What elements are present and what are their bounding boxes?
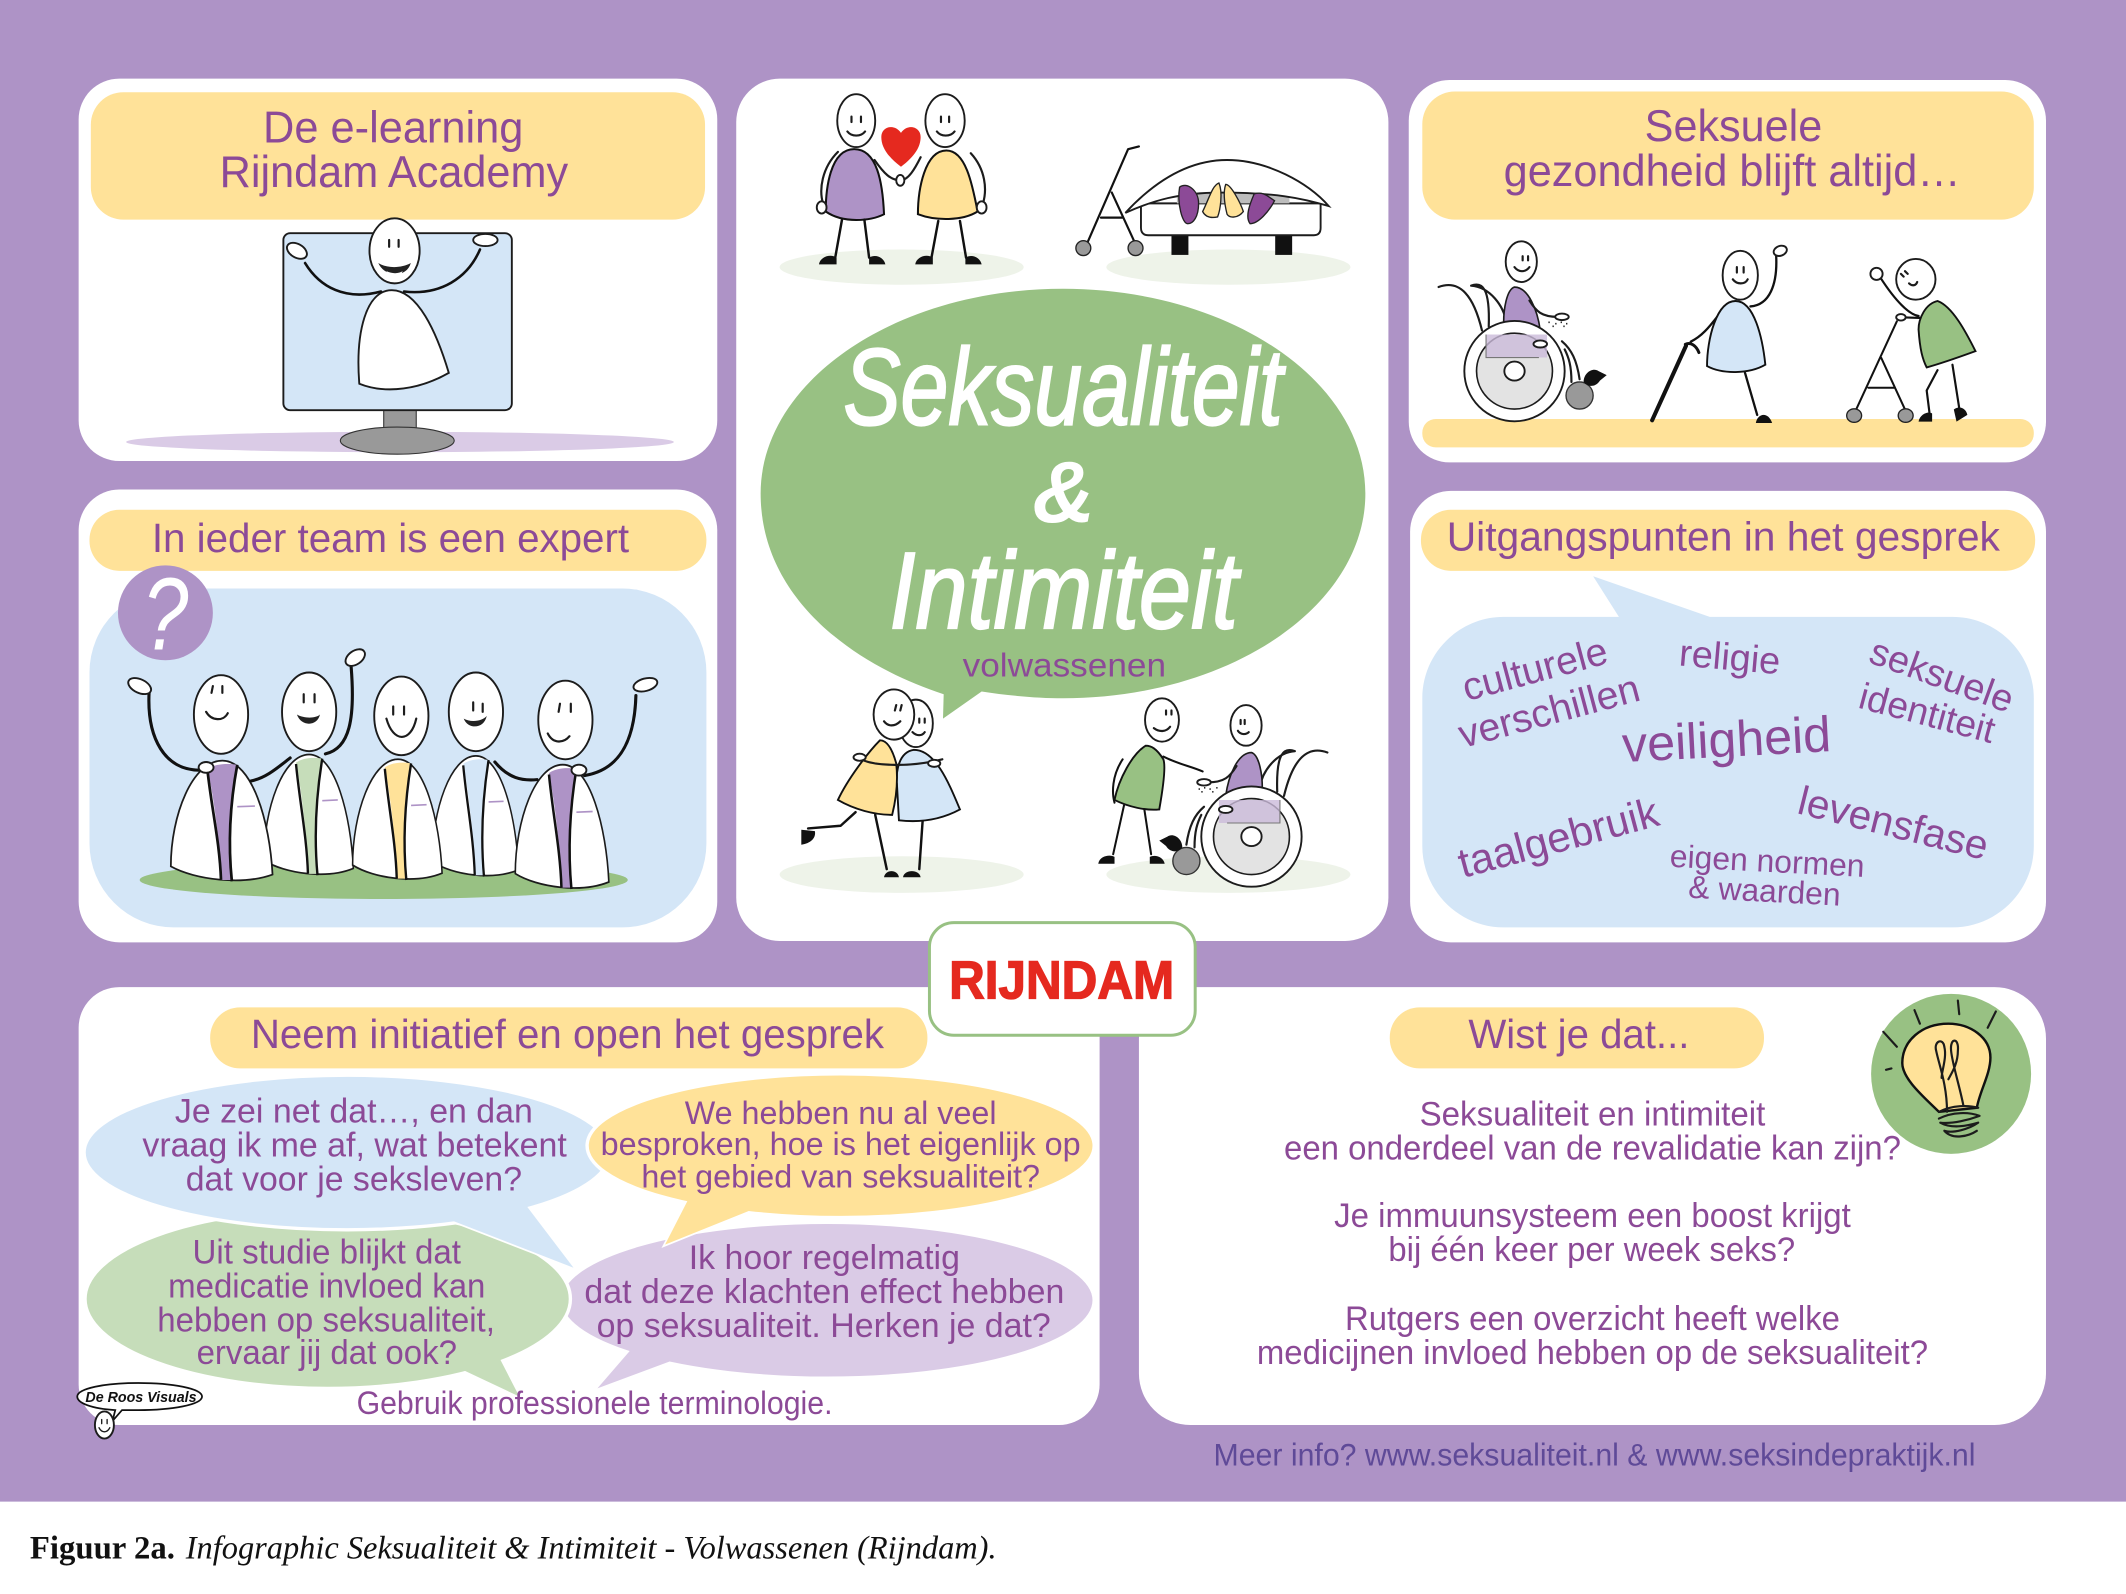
heading: De e-learning Rijndam Academy: De e-learning [263,103,523,152]
heading: De e-learning Rijndam Academy: Rijndam Academy [220,148,568,197]
logo: Rijndam [929,923,1195,1035]
heading: In ieder team is een expert [89,510,706,571]
speech bubble: yellow: We hebben nu al veel [685,1095,997,1131]
heading: Seksuele gezondheid blijft altijd: Seksuele [1645,102,1822,151]
speech bubble: title: Intimiteit [889,530,1241,651]
text: did you know facts: een onderdeel van de revalidatie kan zijn? [1284,1129,1901,1167]
speech bubble with keywords: culturele [1457,629,1612,710]
speech bubble with keywords: verschillen [1454,666,1644,757]
speech bubble with keywords: seksuele [1864,631,2019,721]
illustration: five team members [126,646,659,899]
speech bubble: purple [560,1222,1094,1388]
speech bubble with keywords [1422,576,2034,927]
heading: Uitgangspunten in het gesprek [1421,510,2035,571]
speech bubble with keywords: & waarden [1688,869,1842,913]
text: green bubble question [157,1234,495,1372]
text: green bubble question: medicatie invloed kan [168,1268,485,1306]
panel: starting points in conversation [1410,491,2046,942]
heading: Neem initiatief en open het gesprek: Neem initiatief en open het gesprek [251,1011,885,1057]
icon: heart [881,127,921,167]
panel: did you know [1139,987,2046,1425]
illustration: hugging couple [780,689,1024,893]
text: did you know facts: Seksualiteit en intimiteit [1420,1095,1766,1133]
speech bubble with keywords: eigen normen [1669,838,1865,884]
illustration: person with walker [1847,259,1975,422]
heading: In ieder team is een expert: In ieder team is een expert [152,515,629,561]
illustration: couple with heart [780,94,1024,285]
heading: De e-learning Rijndam Academy [91,92,705,220]
speech bubble: blue: Je zei net dat…, en dan [175,1093,533,1131]
speech bubble: green [85,1209,570,1397]
text: did you know facts: medicijnen invloed hebben op de seksualiteit? [1257,1334,1928,1372]
ground bar [1422,419,2034,447]
heading: Wist je dat: Wist je dat... [1468,1011,1689,1057]
speech bubble: blue: vraag ik me af, wat betekent [142,1127,567,1165]
text: did you know facts: Je immuunsysteem een boost krijgt [1334,1197,1851,1235]
speech bubble with keywords: levensfase [1794,777,1993,869]
panel: sexual health always [1409,80,2046,462]
icon: question mark: ? [142,557,188,672]
speech bubble: title: & [1032,444,1095,541]
icon: question mark [118,557,213,672]
speech bubble with keywords: religie [1678,633,1782,683]
speech bubble: title: volwassenen [963,648,1166,685]
speech bubble: purple: op seksualiteit. Herken je dat? [597,1307,1051,1345]
text: did you know facts: bij één keer per week seks? [1388,1231,1795,1269]
speech bubble: purple: Ik hoor regelmatig [689,1239,960,1277]
heading: Seksuele gezondheid blijft altijd [1422,92,2034,220]
speech bubble: title [761,289,1365,719]
illustration: figure in computer monitor [126,218,674,454]
heading: Neem initiatief en open het gesprek [210,1007,927,1068]
text: did you know facts [1257,1095,1928,1372]
text: green bubble question: hebben op seksualiteit, [157,1301,495,1339]
speech bubble with keywords: taalgebruik [1453,788,1665,887]
speech bubble: yellow [587,1074,1094,1245]
speech bubble: yellow: besproken, hoe is het eigenlijk op [601,1126,1081,1162]
speech bubble: purple: dat deze klachten effect hebben [584,1273,1064,1311]
panel: central title [736,79,1388,941]
speech bubble: title: Seksualiteit [843,326,1286,447]
text: green bubble question: Uit studie blijkt dat [193,1234,462,1272]
text: did you know facts: Rutgers een overzicht heeft welke [1345,1300,1840,1338]
heading: Wist je dat [1390,1007,1764,1068]
caption: Figuur 2a. [30,1530,175,1567]
speech bubble with keywords: identiteit [1855,675,2000,751]
logo: De Roos Visuals: De Roos Visuals [85,1390,197,1406]
heading: Uitgangspunten in het gesprek: Uitgangspunten in het gesprek [1447,513,2001,559]
heading: Seksuele gezondheid blijft altijd: gezondheid blijft altijd… [1504,147,1961,196]
text: more info links: Meer info? www.seksualiteit.nl & www.seksindepraktijk.nl [1214,1437,1975,1473]
icon: light bulb [1871,994,2031,1154]
illustration: person in wheelchair [1439,241,1607,421]
panel: e-learning [79,79,717,461]
logo: De Roos Visuals [77,1383,202,1439]
speech bubble: yellow: het gebied van seksualiteit? [641,1159,1040,1195]
speech bubble: blue: dat voor je seksleven? [186,1160,522,1198]
illustration: caregiver and wheelchair user [1098,698,1350,893]
caption: Infographic Seksualiteit & Intimiteit - Volwassenen (Rijndam). [185,1531,997,1567]
illustration: bed with walker [1076,146,1350,285]
speech bubble: blue [84,1075,610,1268]
logo: Rijndam: RIJNDAM [949,951,1174,1011]
note: professional terminology: Gebruik professionele terminologie. [357,1385,833,1421]
text: green bubble question: ervaar jij dat ook? [197,1334,457,1372]
blue background area [89,588,706,927]
panel: take initiative [77,987,1100,1439]
panel: team expert [79,489,717,942]
speech bubble with keywords: veiligheid [1621,706,1832,773]
illustration: person with cane [1652,244,1788,423]
